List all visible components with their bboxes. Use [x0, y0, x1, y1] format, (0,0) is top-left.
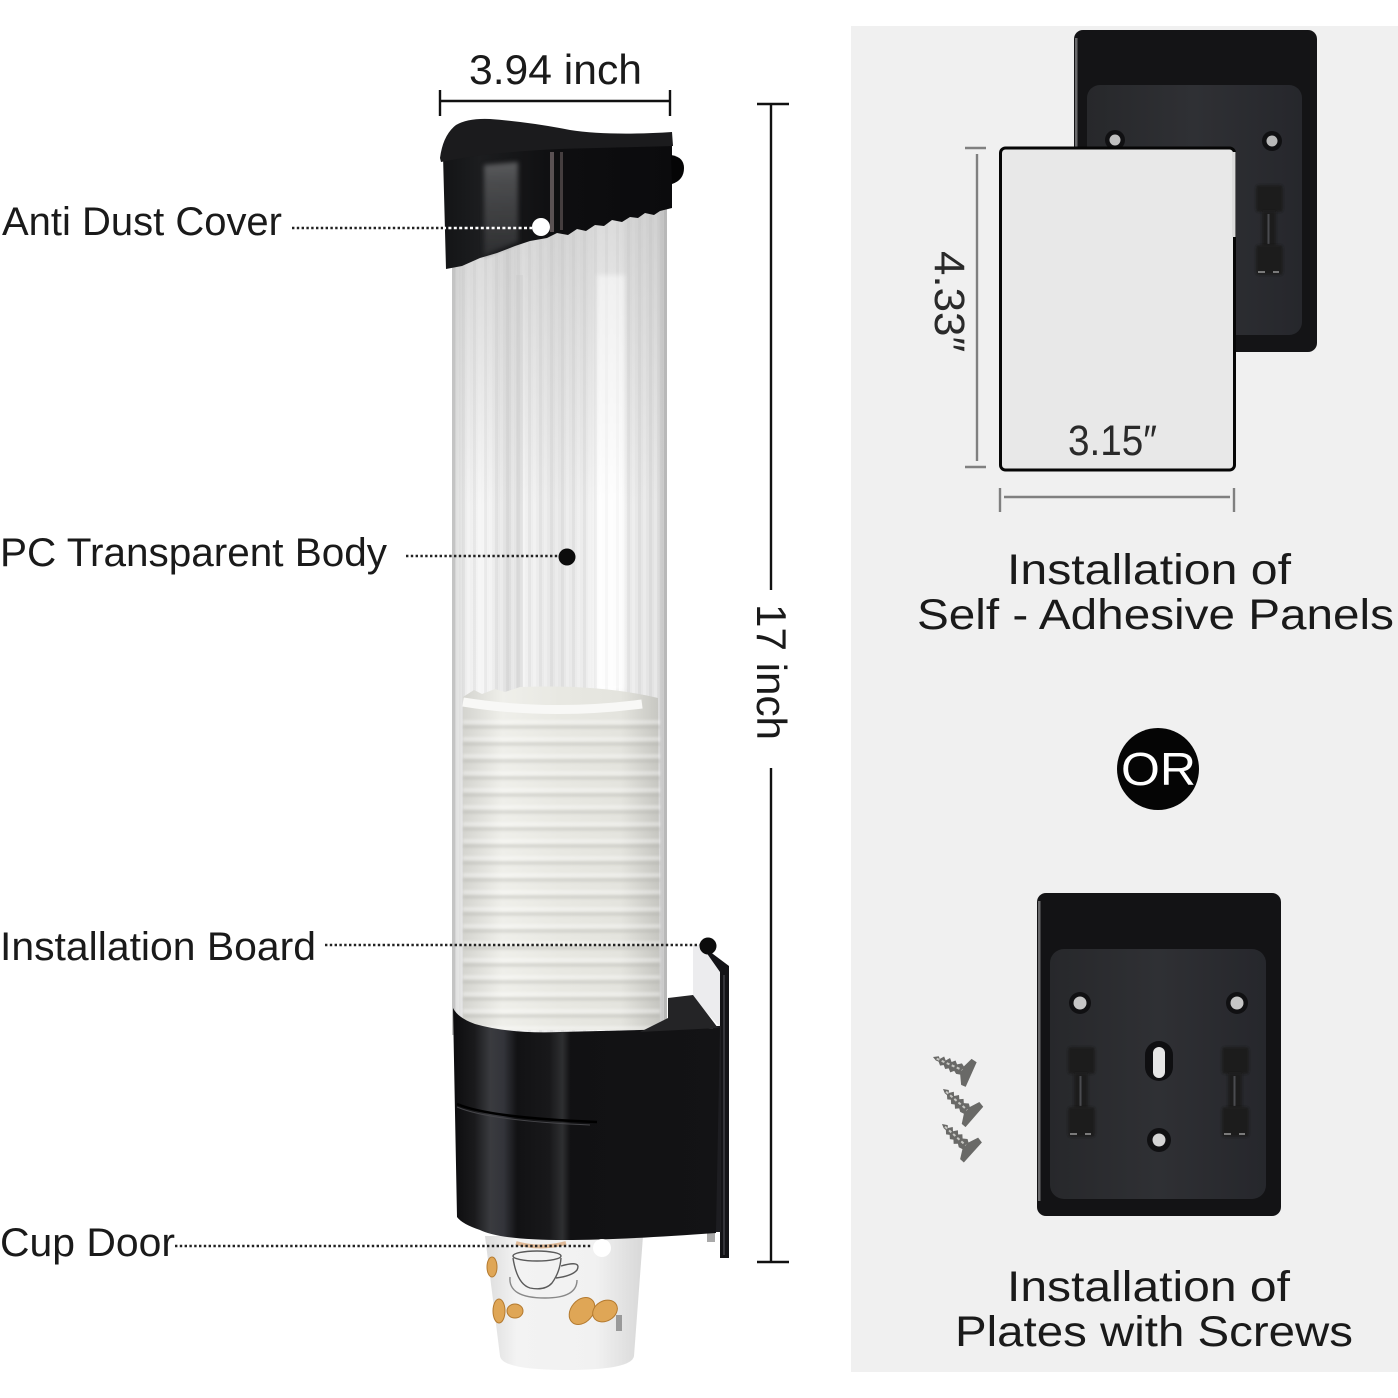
heading: plates with screws installation — [955, 1263, 1353, 1356]
dimension: width 3.94 inch — [440, 46, 670, 116]
OR badge — [1117, 728, 1199, 810]
heading: self-adhesive installation: Self - Adhesive Panels — [917, 591, 1394, 639]
coffee cup print — [510, 1251, 578, 1298]
callout: PC transparent body — [0, 531, 576, 575]
OR badge: OR — [1121, 743, 1196, 795]
anti dust cover — [440, 119, 684, 269]
dimension: height 17 inch — [748, 104, 795, 1262]
coffee bean prints — [487, 1257, 621, 1330]
transparent tube body — [452, 205, 667, 1035]
background panel: installation options — [851, 26, 1398, 1372]
installation board — [693, 945, 729, 1258]
dimension: panel height 4.33 — [925, 148, 986, 467]
callout: anti dust cover — [2, 200, 550, 244]
callout: PC transparent body: PC Transparent Body — [0, 531, 387, 575]
callout: installation board: Installation Board — [0, 925, 316, 969]
dimension: panel height 4.33: 4.33″ — [925, 251, 973, 352]
back plate: adhesive option — [1074, 30, 1317, 352]
dimension: height 17 inch: 17 inch — [748, 604, 795, 740]
heading: self-adhesive installation: Installation of — [1007, 546, 1292, 594]
stack of paper cups — [463, 686, 660, 1030]
callout: anti dust cover: Anti Dust Cover — [2, 200, 282, 244]
mounting plate with screw holes — [1037, 893, 1281, 1216]
cup holder base — [453, 995, 720, 1240]
screws — [927, 1044, 984, 1163]
callout: cup door: Cup Door — [0, 1221, 175, 1265]
dispenser product — [440, 119, 729, 1370]
paper cup — [485, 1236, 643, 1370]
steam print — [516, 1243, 566, 1246]
heading: plates with screws installation: Installation of — [1007, 1263, 1291, 1311]
adhesive panel — [1000, 148, 1236, 470]
recycle icon print — [616, 1315, 622, 1331]
dimension: panel width 3.15: 3.15″ — [1068, 417, 1157, 465]
heading: self-adhesive installation — [917, 546, 1394, 639]
callout: cup door — [0, 1221, 611, 1265]
heading: plates with screws installation: Plates with Screws — [955, 1308, 1353, 1356]
callout: installation board — [0, 925, 716, 969]
dimension: panel width 3.15 — [1000, 417, 1234, 512]
dimension: width 3.94 inch: 3.94 inch — [469, 46, 642, 93]
